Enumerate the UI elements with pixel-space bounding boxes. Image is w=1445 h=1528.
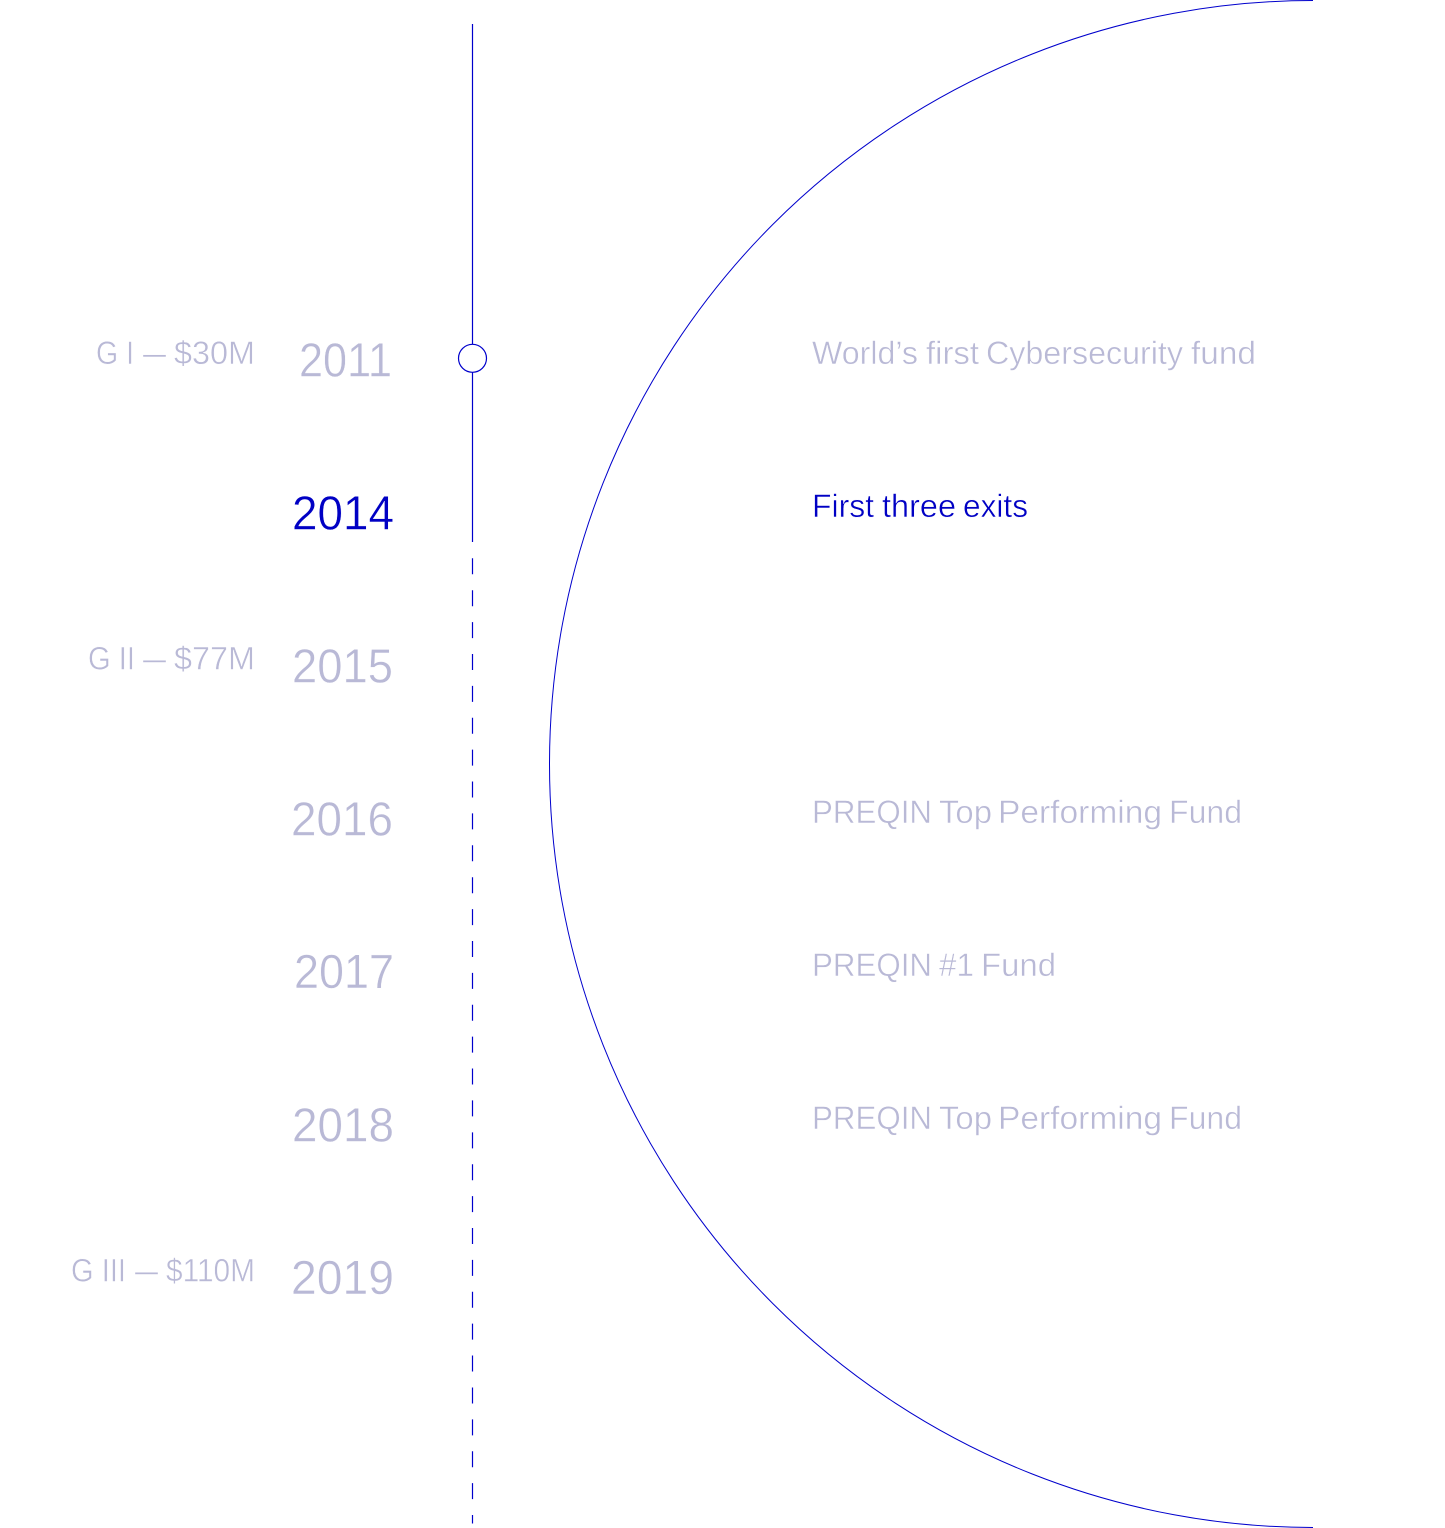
label: G III (71, 1252, 255, 1288)
milestone 2011: World’s (812, 335, 918, 371)
milestone descriptions (812, 335, 1256, 1136)
milestone 2014 (highlighted): three (882, 488, 956, 524)
year 2014 (highlighted): 2014 (292, 488, 394, 540)
label: G III: G III (71, 1252, 126, 1288)
milestone 2011: fund (1191, 335, 1256, 371)
milestone 2017: #1 (939, 947, 974, 983)
year 2019: 2019 (291, 1252, 394, 1305)
milestone 2011: Cybersecurity (986, 335, 1183, 371)
milestone 2016 (812, 794, 1242, 830)
milestone 2011 (812, 335, 1256, 371)
milestone 2018: Top (939, 1100, 992, 1136)
label: G II (88, 640, 255, 676)
label: G I: G I (96, 335, 134, 371)
timeline axis (458, 24, 486, 1524)
milestone 2016: Top (939, 794, 992, 830)
milestone 2014 (highlighted): exits (963, 488, 1028, 524)
milestone 2017: PREQIN (812, 947, 932, 983)
large semicircle arc (550, 0, 1313, 1528)
milestone 2017 (812, 947, 1056, 983)
solid axis segment (472, 24, 474, 542)
axis marker circle at 2011 (458, 344, 486, 372)
milestone 2018 (812, 1100, 1242, 1136)
milestone 2016: Fund (1169, 794, 1242, 830)
year 2017: 2017 (294, 946, 394, 999)
milestone 2018: Fund (1169, 1100, 1242, 1136)
dashed axis segment (472, 558, 474, 1524)
label: G II: $77M (174, 640, 255, 676)
milestone 2014 (highlighted) (812, 488, 1028, 524)
label: G III: $110M (166, 1252, 255, 1288)
label: G II: — (143, 640, 166, 676)
year 2011: 2011 (299, 334, 392, 388)
milestone 2018: Performing (998, 1100, 1162, 1136)
milestone 2017: Fund (981, 947, 1056, 983)
label: G III: — (135, 1252, 158, 1288)
year 2016: 2016 (291, 794, 393, 846)
milestone 2016: Performing (998, 794, 1162, 830)
label: G II: G II (88, 640, 135, 676)
milestone 2011: first (926, 335, 979, 371)
milestone 2014 (highlighted): First (812, 488, 874, 524)
label: G I: — (143, 335, 166, 371)
milestone 2016: PREQIN (812, 794, 932, 830)
fund size labels (71, 335, 255, 1288)
milestone 2018: PREQIN (812, 1100, 932, 1136)
year 2015: 2015 (292, 640, 393, 694)
year labels (291, 334, 394, 1305)
label: G I (96, 335, 255, 371)
label: G I: $30M (174, 335, 255, 371)
year 2018: 2018 (292, 1100, 394, 1152)
